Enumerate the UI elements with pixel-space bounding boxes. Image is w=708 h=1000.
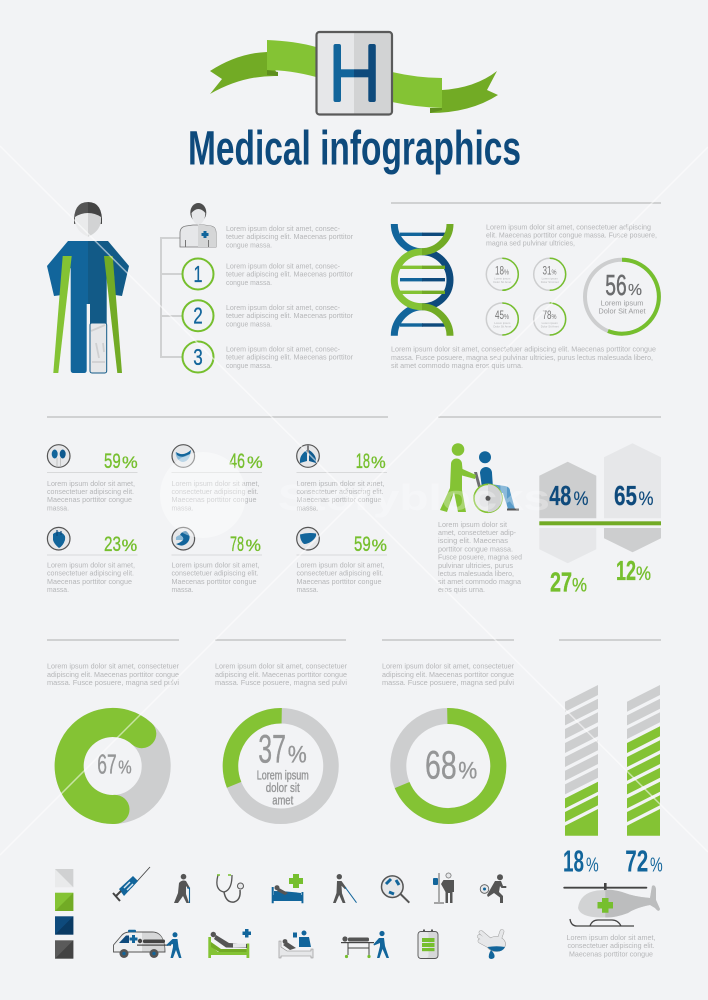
panel: donut 67%: massa. Fusce posuere, magna sed pulvi [47,678,179,687]
hexagon chart: % [636,564,651,585]
icon: patient with IV drip [433,873,454,903]
large gauge 56% [585,260,659,334]
text block: item 3: congue massa. [226,361,272,370]
panel: donut 67%: adipiscing elit. Maecenas porttitor congue [47,670,179,679]
panel: wheelchair statistics [438,416,661,598]
small gauge 78%: % [552,314,556,321]
stat: heart 23% [47,527,138,594]
text block: item 2: Lorem ipsum dolor sit amet, consec- [226,303,341,312]
stat: kidneys 59%: 59 [104,450,121,473]
panel: donut 37%: Lorem ipsum [257,768,309,782]
stat: lungs 18%: massa. [296,503,318,512]
stat: heart 23%: massa. [47,585,69,594]
text block: wheelchair: iscing elit. Maecenas [438,536,508,545]
text block: item 1: Lorem ipsum dolor sit amet, consec- [226,262,341,270]
panel: donut 68%: adipiscing elit. Maecenas porttitor congue [382,670,514,679]
stat: heart 23%: % [122,536,137,555]
small gauge 18%: 18 [495,264,504,278]
stat: lungs 18%: 18 [356,450,370,473]
small gauge 45%: Lorem ipsum [494,321,511,325]
text block: wheelchair: sit amet commodo magna [438,577,521,586]
hexagon chart [539,443,661,598]
small gauge 45%: Dolor Sit Amet [493,324,511,328]
panel: donut 67% [47,639,180,810]
icon: patient on crutches [47,202,129,373]
text block: item 2: tetuer adipiscing elit. Maecenas porttitor [226,311,354,320]
stat: liver 59% [296,527,387,594]
icon: person pushing wheelchair [440,443,519,512]
small gauge 31% [534,258,566,290]
icon: ambulance and paramedic [114,930,182,958]
icon: running medic [480,874,506,903]
panel: donut 67%: % [118,757,132,777]
stat: stomach 46%: Lorem ipsum dolor sit amet, [172,479,260,488]
text block: DNA footer [391,344,656,370]
stat: liver 59%: massa. [296,585,318,594]
stat: intestine 78%: 78 [230,533,244,556]
icon: helicopter [563,883,660,926]
ribbon [210,40,498,113]
panel: organ statistics [47,416,388,594]
large gauge 56%: 56 [605,270,627,302]
stat: lungs 18%: Maecenas porttitor congue [296,495,382,504]
text block: item 3: tetuer adipiscing elit. Maecenas porttitor [226,353,354,362]
small gauge 78%: Lorem ipsum [542,321,558,325]
stat: intestine 78% [172,527,262,594]
stat: lungs 18% [296,445,387,512]
colour swatches legend [55,869,73,959]
panel: donut 68%: Lorem ipsum dolor sit amet, consectetuer [382,662,515,670]
panel: striped bars and helicopter [559,639,663,958]
text block: doctor [226,224,354,249]
icon: stethoscope [217,875,244,902]
small gauge 78% [534,303,566,335]
text block: item 1: tetuer adipiscing elit. Maecenas porttitor [226,270,354,279]
text block: wheelchair: lectus malesuada libero, [438,569,514,578]
stat: stomach 46%: consectetuer adipiscing elit. [172,487,259,496]
text block: doctor: Lorem ipsum dolor sit amet, consec- [226,224,341,233]
stat: heart 23%: Lorem ipsum dolor sit amet, [47,560,135,570]
hexagon chart: % [572,576,587,597]
hexagon chart: 12 [616,555,636,586]
watermark [0,146,708,855]
small gauge 45% [486,303,518,335]
stat: stomach 46%: Maecenas porttitor congue [172,495,256,504]
text block: helicopter [566,933,656,958]
stat: kidneys 59%: % [122,453,138,472]
stat: stomach 46%: massa. [172,503,194,512]
icon: IV blood bag [418,930,438,958]
panel: donut 37%: adipiscing elit. Maecenas porttitor congue [215,670,347,679]
number badge 3 [182,342,214,372]
text block: DNA footer: massa. Fusce posuere, magna sed pulvinar ultricies, purus lectus malesuada libero, [391,353,653,362]
text block: wheelchair: eros quis urna. [438,585,485,594]
icon: elderly man with cane [174,874,190,903]
text block: wheelchair [438,520,522,594]
panel: donut 37%: dolor sit [266,780,300,795]
text block: DNA footer: Lorem ipsum dolor sit amet, consectetuer adipiscing elit. Maecenas porttitor congue [391,344,656,354]
hexagon chart: 65 [614,480,637,511]
icon: reclining patient on green bed [208,929,251,958]
panel: patient and numbered list [47,202,354,373]
panel: donut 37%: Lorem ipsum dolor sit amet, consectetuer [215,662,348,670]
icon: hand with blood drop [480,932,506,959]
small gauge 31%: Lorem ipsum [542,276,558,280]
text block: item 1 [226,262,354,287]
text block: item 2 [226,303,354,328]
text block: item 3: Lorem ipsum dolor sit amet, consec- [226,344,341,354]
text block: DNA intro: magna sed pulvinar ultricies, [486,239,575,248]
icon: syringe [113,867,150,901]
panel: donut 37%: % [288,742,307,769]
small gauge 31%: 31 [542,264,552,278]
stat: lungs 18%: % [371,453,386,472]
stat: heart 23%: consectetuer adipiscing elit. [47,569,134,578]
text block: helicopter: Lorem ipsum dolor sit amet, [566,933,656,942]
text block: wheelchair: Fusce posuere, magna sed [438,552,522,562]
watermark: Storyblocks [278,477,550,518]
icon: bed with green cross [272,874,303,903]
number badge 1: 1 [194,261,202,287]
number badge 3: 3 [193,344,203,370]
stat: stomach 46%: % [247,453,263,472]
panel: donut 37%: massa. Fusce posuere, magna sed pulvi [215,678,347,687]
stat: intestine 78%: consectetuer adipiscing elit. [172,569,259,578]
text block: DNA intro: Lorem ipsum dolor sit amet, consectetuer adipiscing [486,222,651,231]
text block: DNA intro: elit. Maecenas porttitor congue massa. Fusce posuere, [486,230,657,240]
striped bar 18%: % [586,855,599,877]
text block: item 1: congue massa. [226,278,272,287]
text block: item 3 [226,344,354,370]
stat: liver 59%: consectetuer adipiscing elit. [296,569,384,578]
number badge 2: 2 [193,303,203,329]
panel: donut 68%: massa. Fusce posuere, magna sed pulvi [382,678,514,687]
text block: wheelchair: Lorem ipsum dolor sit [438,520,507,529]
number badge 2 [182,300,214,331]
stat: liver 59%: % [372,536,387,555]
hexagon chart: 27 [550,567,572,598]
stat: intestine 78%: Maecenas porttitor congue [172,577,256,586]
stat: kidneys 59%: Lorem ipsum dolor sit amet, [47,479,135,488]
icon: blind man with cane [333,874,356,903]
text block: doctor: tetuer adipiscing elit. Maecenas porttitor [226,232,354,241]
title: Medical infographics [188,122,521,176]
stat: intestine 78%: massa. [172,585,194,594]
small gauge 18%: Lorem ipsum [494,276,511,280]
stat: kidneys 59% [47,445,138,512]
text block: wheelchair: porttitor congue massa. [438,544,513,553]
small gauge 18%: Dolor Sit Amet [493,280,511,284]
panel: donut 37%: amet [272,792,293,808]
large gauge 56%: % [628,282,642,299]
striped bar 72%: 72 [625,844,648,879]
stat: stomach 46% [172,445,263,512]
stat: kidneys 59%: consectetuer adipiscing elit. [47,487,134,496]
striped bar 72% [625,685,663,879]
panel: donut 68%: 68 [425,743,457,787]
small gauge 78%: 78 [542,308,552,322]
striped bar 18% [563,685,599,879]
stat: intestine 78%: Lorem ipsum dolor sit amet, [172,560,260,570]
icon: DNA helix [394,224,450,336]
text block: doctor: congue massa. [226,240,272,249]
small gauge 18% [486,258,518,290]
stat: heart 23%: 23 [104,533,121,556]
small gauge 18%: % [504,270,509,276]
text block: helicopter: Maecenas porttitor congue [569,950,653,958]
panel: donut 68% [382,639,515,816]
large gauge 56%: Lorem ipsum [601,298,643,308]
text block: DNA footer: sit amet commodo magna eros quis urna. [391,361,523,370]
stat: liver 59%: 59 [354,533,371,556]
panel: DNA statistics [391,202,661,370]
small gauge 45%: % [504,314,509,321]
icon: hospital H sign [316,32,392,114]
small gauge 78%: Dolor Sit Amet [541,324,559,328]
striped bar 72%: % [650,855,663,877]
stat: intestine 78%: % [246,536,261,555]
icon: stretcher and paramedic [341,931,389,958]
header ribbon and hospital sign [210,32,498,114]
stat: kidneys 59%: Maecenas porttitor congue [47,495,132,504]
connector lines [160,237,183,358]
striped bar 18%: 18 [563,844,584,879]
large gauge 56%: Dolor Sit Amet [598,306,646,316]
small gauge 31%: Dolor Sit Amet [541,280,559,284]
panel: donut 67%: Lorem ipsum dolor sit amet, consectetuer [47,662,180,670]
panel: donut 37%: 37 [258,728,286,772]
icon: doctor [180,203,216,247]
icon: magnifier with bacteria [382,876,409,903]
stat: liver 59%: Maecenas porttitor congue [296,577,382,586]
hexagon chart: % [574,489,589,510]
stat: liver 59%: Lorem ipsum dolor sit amet, [296,560,384,570]
icon row: medical symbols [113,867,506,959]
icon: patient in hospital bed with doctor [279,930,313,958]
number badge 1 [182,258,214,290]
small gauge 31%: % [552,270,556,276]
stat: heart 23%: Maecenas porttitor congue [47,577,132,586]
stat: kidneys 59%: massa. [47,503,69,512]
text block: item 2: congue massa. [226,319,272,328]
panel: donut 67%: 67 [97,748,117,779]
stat: lungs 18%: Lorem ipsum dolor sit amet, [296,479,384,488]
text block: DNA intro [486,222,657,248]
text block: helicopter: consectetuer adipiscing elit. [568,941,655,950]
stat: lungs 18%: consectetuer adipiscing elit. [296,487,384,496]
hexagon chart: % [638,489,654,510]
text block: wheelchair: amet, consectetuer adip- [438,528,517,537]
panel: donut 68%: % [458,757,477,784]
panel: donut 37% [215,639,348,816]
small gauge 45%: 45 [495,308,504,322]
text block: wheelchair: pulvinar ultricies, purus [438,561,513,570]
stat: stomach 46%: 46 [229,450,245,473]
hexagon chart: 48 [549,480,571,511]
